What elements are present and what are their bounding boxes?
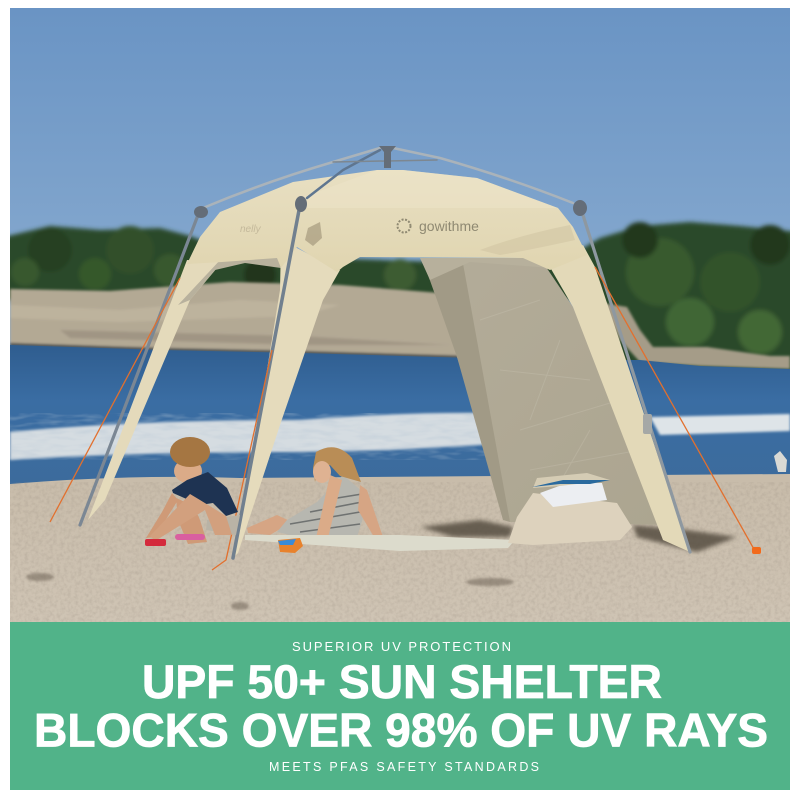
back wall xyxy=(420,258,667,525)
left opening hem xyxy=(178,256,281,305)
sky xyxy=(10,8,790,358)
boy xyxy=(145,437,240,546)
rock cliff xyxy=(10,282,790,369)
guy lines xyxy=(50,267,755,570)
headline line 1: UPF 50+ SUN SHELTER xyxy=(142,656,662,709)
breaking waves xyxy=(10,413,790,460)
shelter xyxy=(50,146,761,570)
frame joints xyxy=(194,146,652,434)
brand marks: gowithme xyxy=(419,218,479,234)
headline line 2: BLOCKS OVER 98% OF UV RAYS xyxy=(34,704,768,758)
distant trees xyxy=(0,222,800,372)
girl xyxy=(247,447,383,538)
beach bag xyxy=(508,473,632,545)
brand marks xyxy=(240,218,479,235)
eyebrow: SUPERIOR UV PROTECTION xyxy=(292,639,511,654)
towel and toys xyxy=(245,535,515,553)
sea xyxy=(10,345,790,485)
photo: beach scene with sun shelter xyxy=(0,8,800,622)
sand xyxy=(10,474,790,622)
seagull xyxy=(774,451,787,472)
brand marks: nelly xyxy=(240,224,262,235)
footnote: MEETS PFAS SAFETY STANDARDS xyxy=(269,760,539,774)
front leg panel xyxy=(233,240,340,558)
left leg panel xyxy=(88,260,222,520)
roof xyxy=(187,170,587,272)
shelter shadow xyxy=(420,520,737,552)
frame poles xyxy=(80,148,690,558)
green banner xyxy=(10,622,790,790)
right leg panel xyxy=(547,245,690,552)
